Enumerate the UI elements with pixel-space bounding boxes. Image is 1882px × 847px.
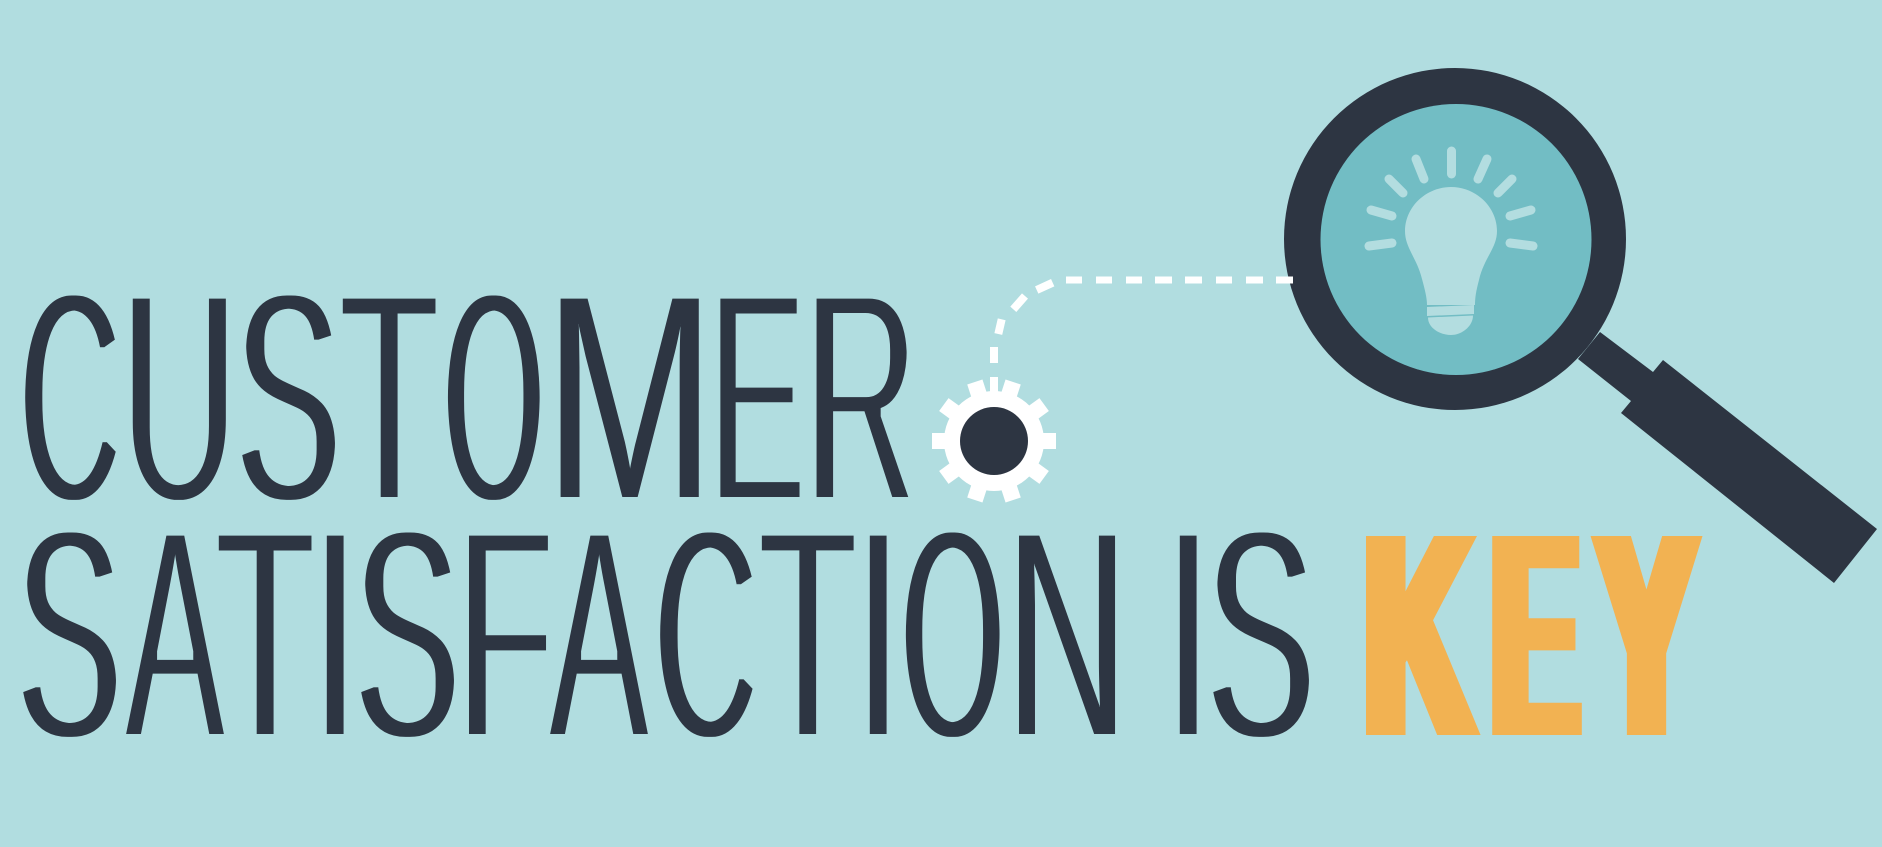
magnifier handle	[1578, 332, 1877, 583]
title line 2: SATISFACTION IS: T	[759, 467, 856, 802]
title line 1: CUSTOMER: R	[805, 230, 917, 565]
icon: gear	[932, 380, 1056, 502]
title line 1: CUSTOMER: O	[444, 229, 544, 565]
title line 1: CUSTOMER: U	[121, 229, 237, 565]
title line 1: CUSTOMER	[20, 229, 917, 565]
icon: magnifying glass	[1284, 68, 1877, 583]
title line 2: SATISFACTION IS: I	[1166, 467, 1210, 802]
title line 2: SATISFACTION IS: F	[457, 466, 553, 802]
title line 1: CUSTOMER: M	[545, 231, 714, 565]
magnifier lens	[1320, 104, 1592, 375]
title highlight: KEY	[1365, 473, 1696, 797]
light bulb rays	[1369, 151, 1533, 246]
title highlight: KEY: K	[1365, 474, 1473, 797]
title line 1: CUSTOMER: E	[710, 229, 805, 565]
title line 2: SATISFACTION IS: I	[856, 467, 900, 802]
dashed connector from gear to magnifier	[994, 280, 1293, 392]
title line 2: SATISFACTION IS: A	[549, 467, 649, 803]
title line 2: SATISFACTION IS: S	[17, 466, 121, 802]
title line 1: CUSTOMER: S	[236, 229, 340, 565]
title line 2: SATISFACTION IS: C	[655, 466, 758, 802]
title line 2: SATISFACTION IS: S	[1207, 468, 1314, 803]
title line 2: SATISFACTION IS	[17, 466, 1314, 803]
title line 2: SATISFACTION IS: O	[902, 467, 1004, 803]
title line 1: CUSTOMER: C	[20, 229, 121, 565]
title highlight: KEY: Y	[1597, 473, 1696, 797]
icon: light bulb	[1405, 187, 1497, 335]
title highlight: KEY: E	[1493, 475, 1578, 797]
title line 2: SATISFACTION IS: S	[355, 466, 459, 802]
title line 2: SATISFACTION IS: N	[1006, 467, 1128, 802]
magnifier ring	[1284, 68, 1626, 410]
title line 2: SATISFACTION IS: A	[125, 467, 225, 803]
title line 2: SATISFACTION IS: I	[313, 467, 357, 802]
title line 2: SATISFACTION IS: T	[216, 466, 314, 802]
title line 1: CUSTOMER: T	[340, 229, 438, 565]
